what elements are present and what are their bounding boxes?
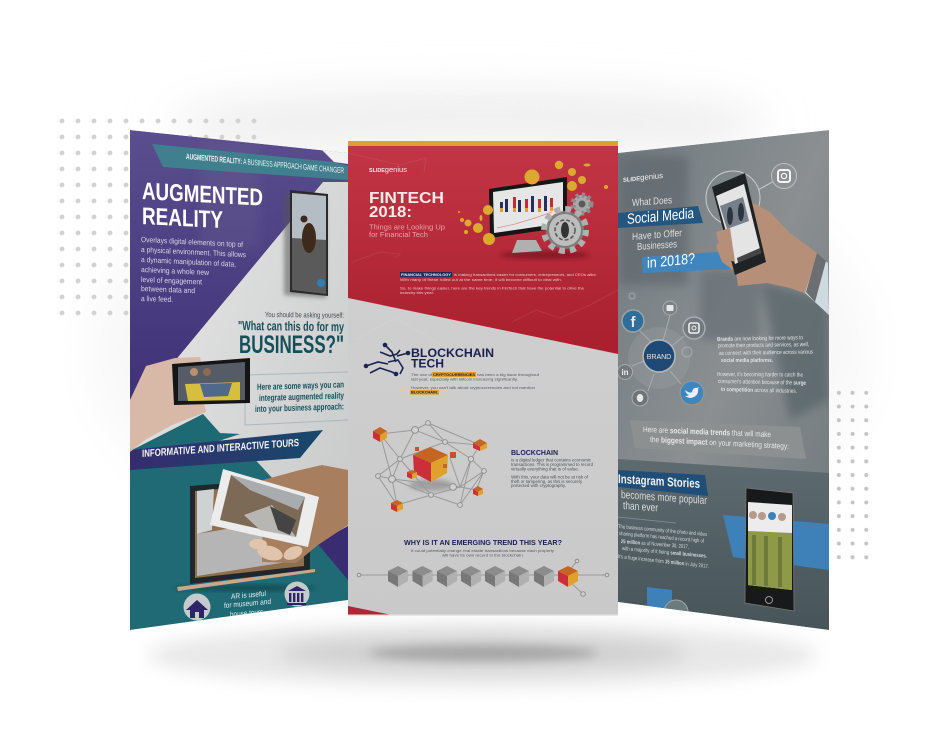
main cube xyxy=(413,447,448,482)
title: social media: in 2018? xyxy=(647,251,695,272)
icon: laptop with phone xyxy=(173,465,348,591)
prompt text: BUSINESS?" xyxy=(239,331,344,359)
ways text xyxy=(255,382,344,414)
prompt text: You should be asking yourself: xyxy=(265,310,344,320)
section: instagram stories: with a majority of it being small businesses. xyxy=(621,546,707,560)
heading: augmented reality: AUGMENTED xyxy=(142,178,263,211)
icon: hand holding phone xyxy=(130,357,250,452)
blockchain intro text xyxy=(410,372,540,395)
teal lower area xyxy=(130,454,348,630)
brands text: Brands are now looking for more ways to xyxy=(717,335,803,343)
why text: will have its own record in the blockchain. xyxy=(442,552,524,558)
callout: trends: Here are social media trends that will make xyxy=(643,425,771,439)
section: instagram stories xyxy=(618,459,829,630)
blockchain description: BLOCKCHAIN xyxy=(511,448,558,457)
banner text: INFORMATIVE AND INTERACTIVE TOURS xyxy=(142,438,299,460)
brands text xyxy=(717,335,813,395)
red corner xyxy=(348,606,392,615)
red hero xyxy=(348,146,618,354)
heading: why: WHY IS IT AN EMERGING TREND THIS YEAR? xyxy=(404,538,562,547)
blockchain description: With this, your data will not be at risk of xyxy=(511,474,589,480)
blockchain description xyxy=(511,448,594,488)
bubbles: social networks: f xyxy=(630,314,636,331)
blockchain intro text: The use of xyxy=(411,372,433,377)
section: instagram stories: The business community of the photo and video xyxy=(618,524,707,538)
dot grid: right xyxy=(832,386,873,564)
section: instagram stories: sharing platform has reached a record high of xyxy=(619,531,704,545)
heading: blockchain tech: BLOCKCHAIN xyxy=(411,346,494,360)
intro text xyxy=(400,272,597,295)
title: social media xyxy=(618,195,732,273)
ribbon text: AUGMENTED REALITY: A BUSINESS APPROACH GAME CHANGER xyxy=(186,152,344,175)
icon: instagram bubble with ring xyxy=(706,164,796,225)
intro text: achieving a whole new xyxy=(141,265,209,277)
icon: instagram phone xyxy=(745,488,794,611)
why text xyxy=(411,548,554,558)
text frame xyxy=(244,403,348,426)
subheading: Things are Looking Up xyxy=(369,224,445,232)
brands text: However, it's becoming harder to catch the xyxy=(717,372,803,379)
title: social media: Have to Offer xyxy=(632,228,683,243)
section: instagram stories: Instagram Stories xyxy=(618,472,700,491)
network diagram xyxy=(373,421,487,512)
title: social media: Businesses xyxy=(637,239,677,253)
ways text: into your business approach: xyxy=(255,401,344,414)
white corner xyxy=(322,150,348,164)
section: instagram stories: 25 million as of November 30, 2017, xyxy=(621,539,689,550)
dot grid: left xyxy=(54,113,262,321)
chain of blocks xyxy=(357,559,609,596)
heading: augmented reality: REALITY xyxy=(142,203,223,233)
caption: museum tours xyxy=(224,590,271,616)
intro text: a dynamic manipulation of data, xyxy=(141,255,236,269)
blockchain description: virtually everything that is of value. xyxy=(511,466,579,472)
blurred photo background xyxy=(618,155,829,420)
title: social media: Social Media xyxy=(627,206,694,228)
title: social media: What Does xyxy=(632,195,672,209)
caption: museum tours: house tours. xyxy=(230,607,265,619)
top stripe xyxy=(348,141,618,146)
heading: augmented reality xyxy=(142,182,262,228)
brands text: as connect with their audience across various xyxy=(719,350,813,357)
intro text: So, to make things easier, here are the key trends in FinTech that have the potential to drive the xyxy=(400,286,584,290)
blockchain description: protected with cryptography. xyxy=(511,483,566,488)
heading: fintech 2018: 2018: xyxy=(369,204,412,221)
icon: museum xyxy=(284,582,310,606)
bubbles: social networks: in xyxy=(621,368,629,377)
heading: blockchain tech: TECH xyxy=(411,356,444,370)
intro text: Overlays digital elements on top of xyxy=(141,235,244,249)
heading: fintech 2018: FINTECH xyxy=(369,190,444,207)
blockchain intro text: last year, especially with Bitcoin increasing significantly. xyxy=(411,376,518,382)
intro text: between data and xyxy=(141,284,195,295)
intro text: a live feed. xyxy=(141,294,173,304)
caption: museum tours: for museum and xyxy=(224,597,271,610)
ways text: Here are some ways you can xyxy=(257,379,344,392)
blockchain description: transactions. This is programmed to record xyxy=(511,462,594,467)
subheading xyxy=(369,224,445,239)
brands text: consumer's attention because of the surge xyxy=(718,379,807,387)
blockchain intro text: has been a big issue throughout xyxy=(477,372,540,377)
panel: augmented reality xyxy=(130,130,348,630)
intro text: is making transactions easier for consumers, entrepreneurs, and CEOs alike. xyxy=(454,272,597,277)
blockchain intro text: However, you can't talk about cryptocurrencies and not mention xyxy=(411,385,535,390)
intro text: level of engagement xyxy=(141,275,203,286)
icon: circuit brain xyxy=(364,344,410,376)
teal header ribbon xyxy=(152,144,348,180)
logo: SLIDEgenius xyxy=(369,167,408,174)
icon: monitor with gears and coins xyxy=(458,161,608,259)
caption: museum tours: AR is useful xyxy=(231,589,266,601)
banner: informative tours xyxy=(130,430,323,470)
blockchain description: theft or tampering, as this is securely xyxy=(511,479,583,484)
panel: social media xyxy=(618,130,829,630)
intro text: industry this year. xyxy=(400,290,434,295)
icon: AR phone xyxy=(284,190,328,298)
section: instagram stories: becomes more popular xyxy=(621,489,707,507)
intro text xyxy=(141,235,246,304)
callout: trends: the biggest impact on your marketing strategy: xyxy=(650,435,789,451)
intro text: With many of these rolled out at the same time, it will become difficult to deal with. xyxy=(400,277,562,282)
heading: blockchain tech xyxy=(411,346,494,370)
ribbon behind phone xyxy=(723,515,829,570)
blockchain intro text: BLOCKCHAIN. xyxy=(411,390,438,394)
purple header area xyxy=(130,130,348,420)
callout: trends xyxy=(630,420,806,459)
why text: It could potentially change real estate transactions because each property xyxy=(411,548,554,553)
icon: hand holding phone xyxy=(712,173,829,315)
bottom bubble xyxy=(647,587,688,612)
brands text: in competition across all industries. xyxy=(721,387,797,395)
heading: fintech 2018 xyxy=(369,190,444,221)
subheading: for Financial Tech xyxy=(369,232,428,239)
section: instagram stories: It's a huge increase from 15 million in July 2017. xyxy=(618,554,709,570)
ways text: integrate augmented reality xyxy=(259,390,344,403)
bubbles: social networks: BRAND xyxy=(647,354,671,361)
small cubes xyxy=(373,427,487,512)
prompt text: "What can this do for my xyxy=(238,318,345,334)
blockchain intro text: CRYPTOCURRENCIES xyxy=(433,372,475,377)
intro text: a physical environment. This allows xyxy=(141,245,246,259)
logo: SLIDEgenius xyxy=(623,171,663,184)
section: instagram stories: than ever xyxy=(623,500,658,514)
bubbles: social networks xyxy=(618,293,705,406)
circuit texture xyxy=(348,153,618,345)
prompt text xyxy=(238,312,344,353)
intro text: FINANCIAL TECHNOLOGY xyxy=(401,272,451,277)
bottom edge xyxy=(348,614,618,616)
blockchain description: is a digital ledger that contains economic xyxy=(511,458,591,462)
icon: house xyxy=(184,594,210,620)
panel: fintech xyxy=(348,141,618,616)
brands text: promote their products and services, as well, xyxy=(718,342,809,349)
floor shadow xyxy=(148,623,818,687)
brands text: social media platforms. xyxy=(721,358,773,364)
